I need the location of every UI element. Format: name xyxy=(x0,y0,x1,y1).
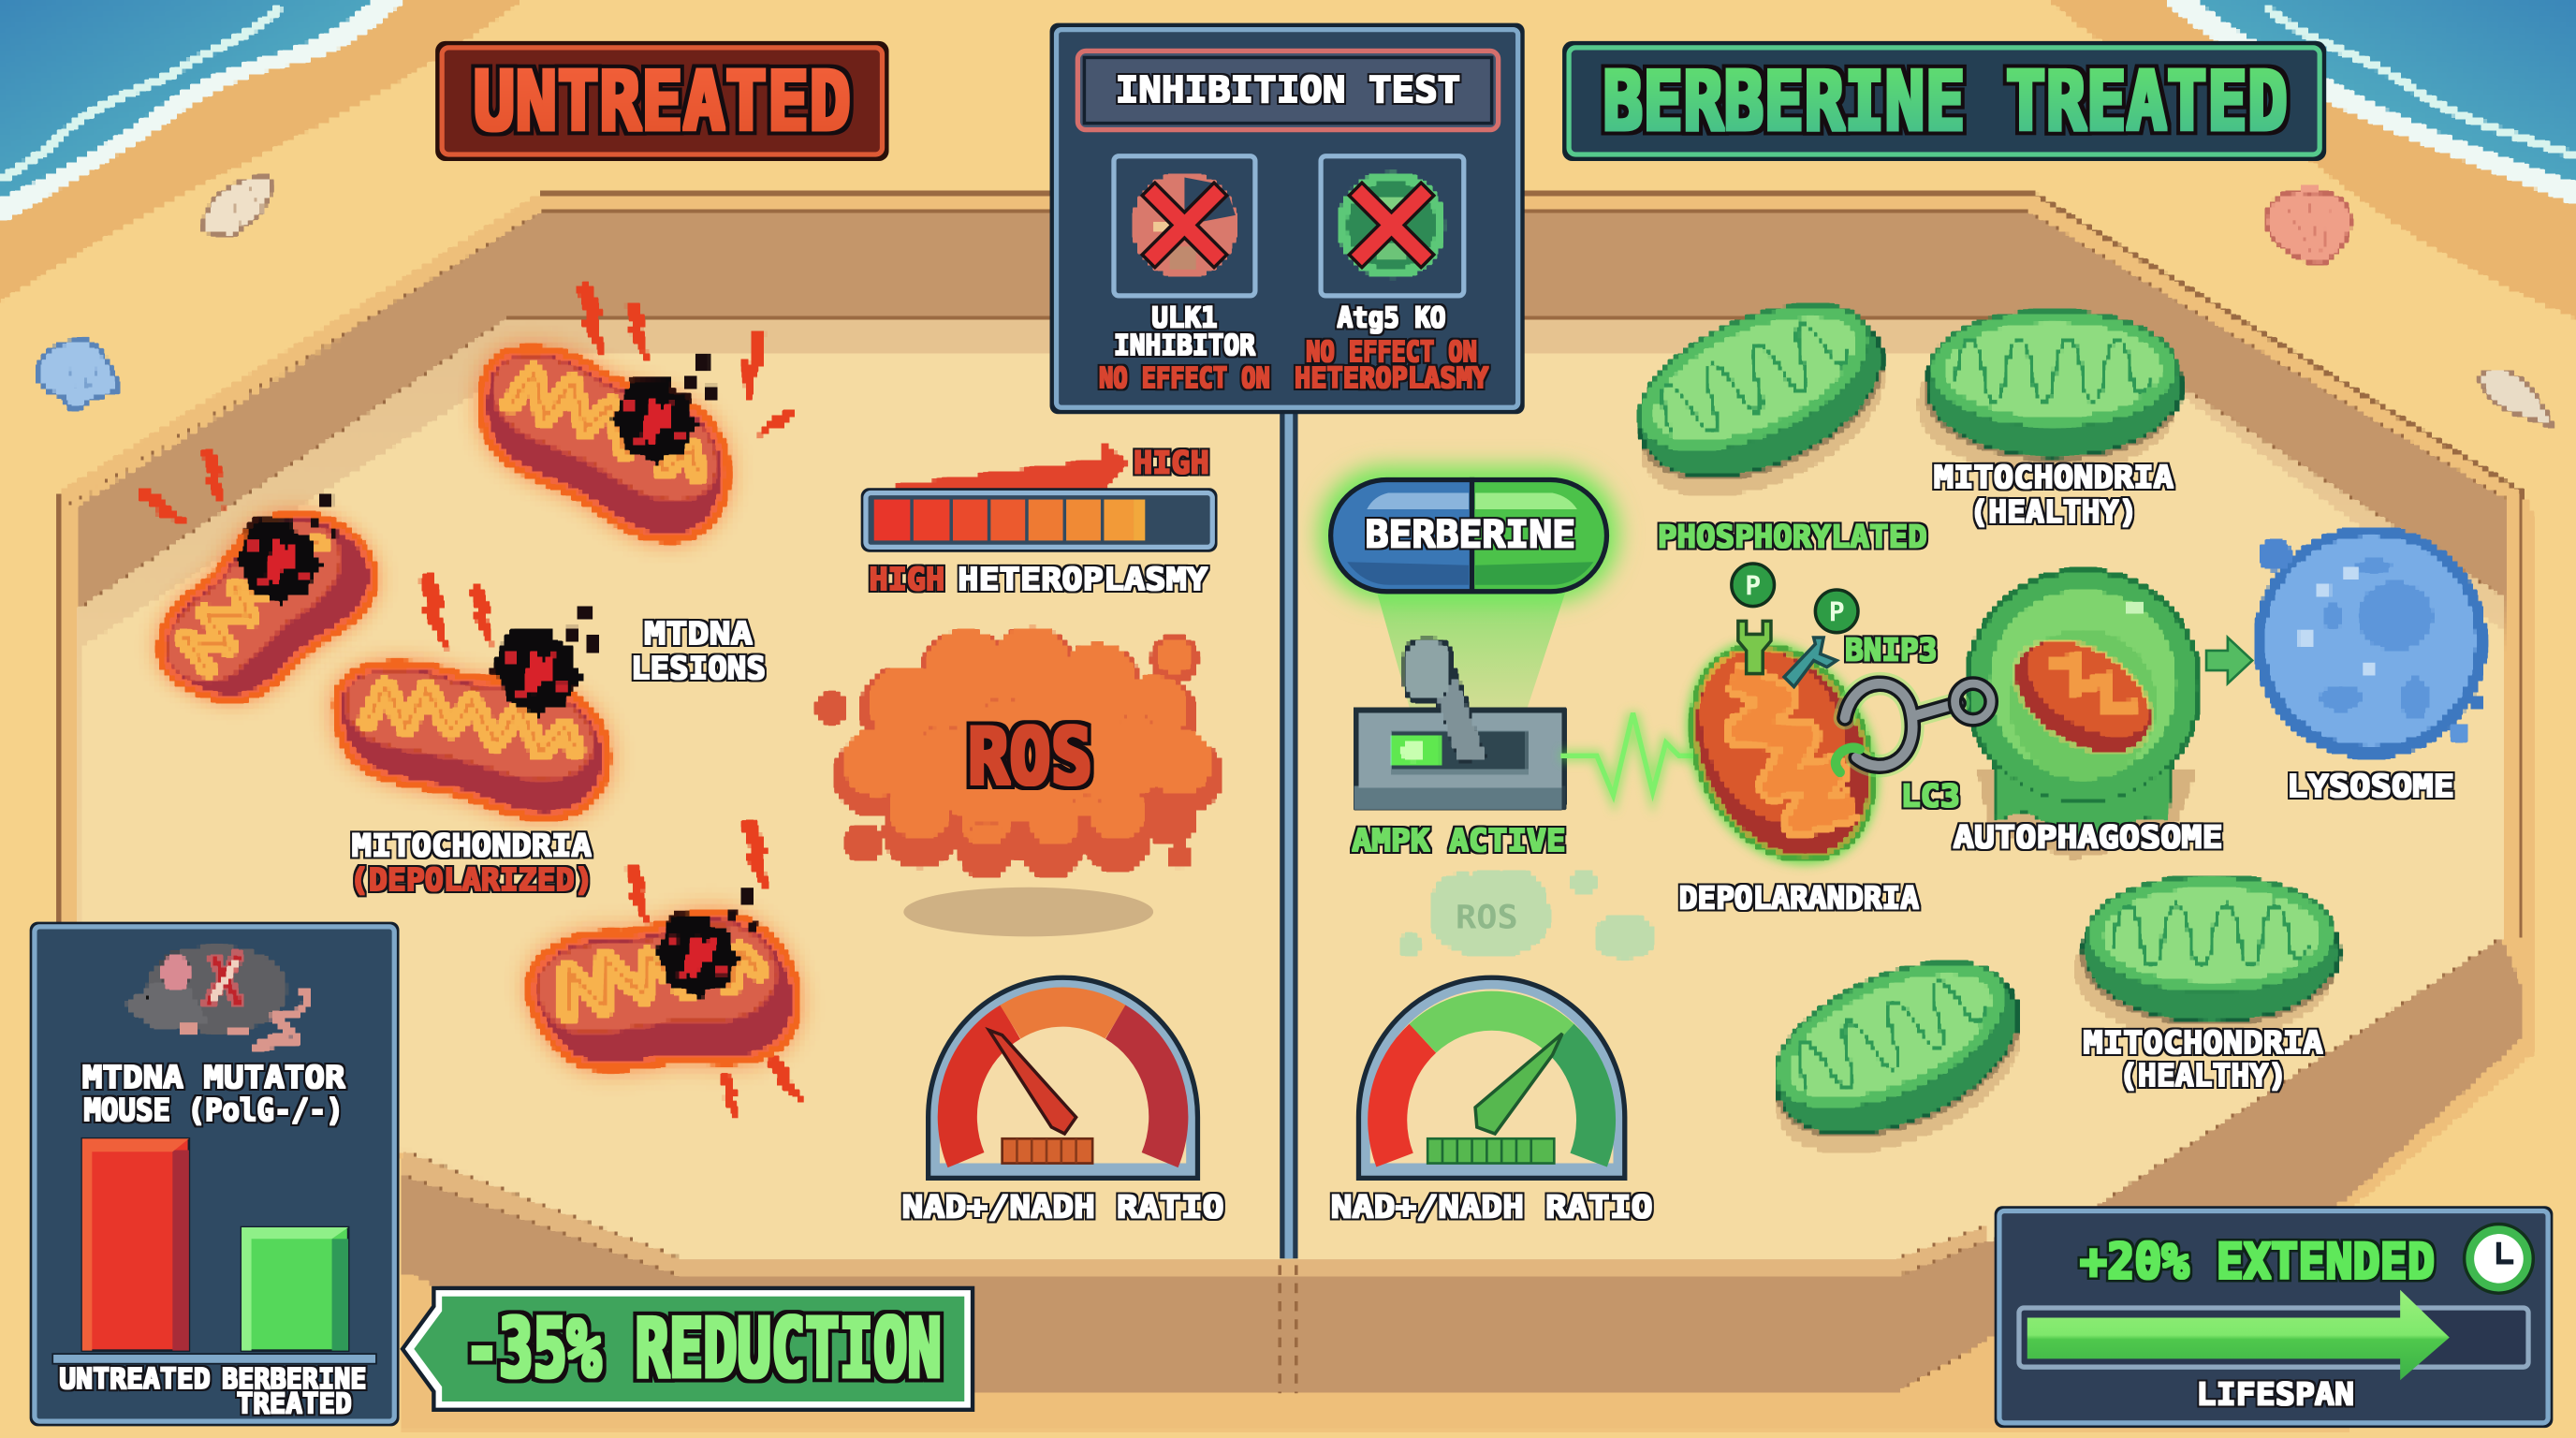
ROS cloud xyxy=(816,627,1222,936)
label: healthy top xyxy=(1934,459,2174,530)
label: mtDNA lesions: MTDNA xyxy=(644,615,753,652)
label: mitochondria depolarized xyxy=(350,827,593,898)
mitochondrion: damaged D xyxy=(516,818,816,1127)
lifespan label: LIFESPAN xyxy=(2197,1376,2354,1413)
mitochondrion: damaged C xyxy=(337,574,607,816)
label: ULK1 inhibitor: INHIBITOR xyxy=(1114,330,1255,362)
inhibition test heading xyxy=(1077,51,1499,130)
chart axis xyxy=(52,1354,376,1364)
mitochondrion: healthy top-right xyxy=(1919,312,2180,473)
label: phosphorylated: PHOSPHORYLATED xyxy=(1658,518,1927,554)
shell: beige right xyxy=(2481,371,2550,424)
heteroplasmy meter: HETEROPLASMY xyxy=(958,561,1208,597)
mitochondrion: depolarized tagged xyxy=(1648,564,1991,899)
panel: inhibition test xyxy=(1050,23,1525,414)
bar: untreated xyxy=(82,1138,189,1351)
label: BNIP3: BNIP3 xyxy=(1845,632,1937,668)
label: mtDNA lesions: LESIONS xyxy=(631,650,766,686)
heteroplasmy meter: HIGH xyxy=(869,561,944,597)
phospho tag 1 xyxy=(1732,564,1774,607)
beam xyxy=(1377,592,1566,731)
label: depolarandria: DEPOLARANDRIA xyxy=(1679,880,1919,917)
phospho tag 2 xyxy=(1815,590,1858,633)
label: mitochondria depolarized: MITOCHONDRIA xyxy=(352,827,592,863)
label: LC3: LC3 xyxy=(1901,778,1960,814)
label: mouse model: MOUSE (PolG-/-) xyxy=(84,1092,344,1128)
lifespan heading: +20% EXTENDED xyxy=(2080,1233,2435,1290)
pill: berberine xyxy=(1319,466,1618,601)
label: mtDNA lesions xyxy=(631,615,766,686)
AMPK label: AMPK ACTIVE xyxy=(1352,822,1566,858)
LC3 hook and chain xyxy=(1836,683,1991,772)
header: berberine treated xyxy=(1562,41,2326,161)
faded ROS cloud xyxy=(1399,869,1654,958)
header: berberine treated: BERBERINE TREATED xyxy=(1603,54,2288,150)
switch xyxy=(1357,640,1562,807)
axis labels: UNTREATED xyxy=(59,1363,211,1396)
callout: reduction xyxy=(402,1288,973,1410)
label: mitochondria depolarized: (DEPOLARIZED) xyxy=(350,861,593,898)
icon: ULK1 blocked xyxy=(1114,156,1255,296)
gauge: NAD+/NADH treated xyxy=(1331,977,1653,1225)
gauge: NAD+/NADH untreated xyxy=(902,977,1224,1225)
label: mouse model xyxy=(82,1059,346,1128)
shell: beige top-left xyxy=(204,178,270,235)
phospho tag 2: P xyxy=(1829,596,1845,627)
header: untreated xyxy=(435,41,889,161)
axis labels: TREATED xyxy=(237,1387,352,1420)
AMPK switch and beam xyxy=(1352,592,1566,858)
faded ROS cloud: ROS xyxy=(1456,899,1518,937)
axis labels xyxy=(59,1363,366,1420)
label: autophagosome: AUTOPHAGOSOME xyxy=(1954,819,2223,856)
phospho tag 1: P xyxy=(1745,570,1761,601)
mitochondrion: damaged B xyxy=(135,448,392,743)
label: ULK1 inhibitor xyxy=(1099,301,1270,395)
label: mouse model: MTDNA MUTATOR xyxy=(82,1059,346,1095)
label: ULK1 inhibitor: ULK1 xyxy=(1151,301,1218,334)
arrow: rising xyxy=(896,444,1125,486)
ROS label: ROS xyxy=(968,712,1092,802)
arrow: to lysosome xyxy=(2206,638,2252,683)
bar: berberine treated xyxy=(242,1227,348,1351)
ECG signal xyxy=(1560,713,1717,795)
label: healthy top: MITOCHONDRIA xyxy=(1934,459,2174,495)
label: ULK1 inhibitor: NO EFFECT ON xyxy=(1099,362,1270,395)
ocean: top-right xyxy=(2165,0,2576,204)
icon: clock xyxy=(2465,1224,2533,1293)
pill: berberine: BERBERINE xyxy=(1365,512,1575,556)
label: lysosome: LYSOSOME xyxy=(2287,768,2454,804)
icon: mutator mouse xyxy=(124,946,307,1049)
ocean: top-left xyxy=(0,0,402,222)
panel: lifespan xyxy=(1995,1206,2553,1428)
receptor: BNIP3 wrench xyxy=(1784,638,1837,687)
gauge: NAD+/NADH treated: NAD+/NADH RATIO xyxy=(1331,1188,1653,1225)
label: Atg5 KO: HETEROPLASMY xyxy=(1295,362,1488,395)
autophagosome xyxy=(1954,572,2223,858)
label: healthy bottom xyxy=(2083,1024,2323,1093)
mitochondrion: healthy bottom-right xyxy=(2076,877,2337,1038)
label: healthy bottom: MITOCHONDRIA xyxy=(2083,1024,2323,1061)
lysosome xyxy=(2256,527,2485,804)
label: Atg5 KO xyxy=(1295,301,1488,395)
receptor: Y xyxy=(1738,621,1771,674)
mitochondrion: healthy top-left xyxy=(1608,274,1912,528)
meter bar xyxy=(862,490,1216,550)
inhibition test heading: INHIBITION TEST xyxy=(1116,69,1460,111)
callout: reduction: -35% REDUCTION xyxy=(465,1301,942,1397)
label: healthy bottom: (HEALTHY) xyxy=(2119,1057,2287,1093)
label: Atg5 KO: NO EFFECT ON xyxy=(1306,336,1477,369)
shell: blue xyxy=(38,342,118,409)
gauge: NAD+/NADH untreated: NAD+/NADH RATIO xyxy=(902,1188,1224,1225)
mitochondrion: damaged A xyxy=(461,283,798,550)
label: Atg5 KO: Atg5 KO xyxy=(1338,301,1445,334)
lifespan bar xyxy=(2019,1290,2528,1380)
heteroplasmy meter: HIGH xyxy=(1134,444,1209,480)
heteroplasmy meter xyxy=(862,444,1216,597)
mitochondrion: healthy bottom-left xyxy=(1745,932,2048,1185)
center divider xyxy=(1280,411,1298,1393)
axis labels: BERBERINE xyxy=(222,1363,366,1396)
icon: Atg5 blocked xyxy=(1321,156,1464,296)
shell: pink xyxy=(2267,185,2349,263)
label: healthy top: (HEALTHY) xyxy=(1969,493,2137,530)
panel: mouse bar chart xyxy=(30,922,400,1426)
header: untreated: UNTREATED xyxy=(474,54,851,150)
